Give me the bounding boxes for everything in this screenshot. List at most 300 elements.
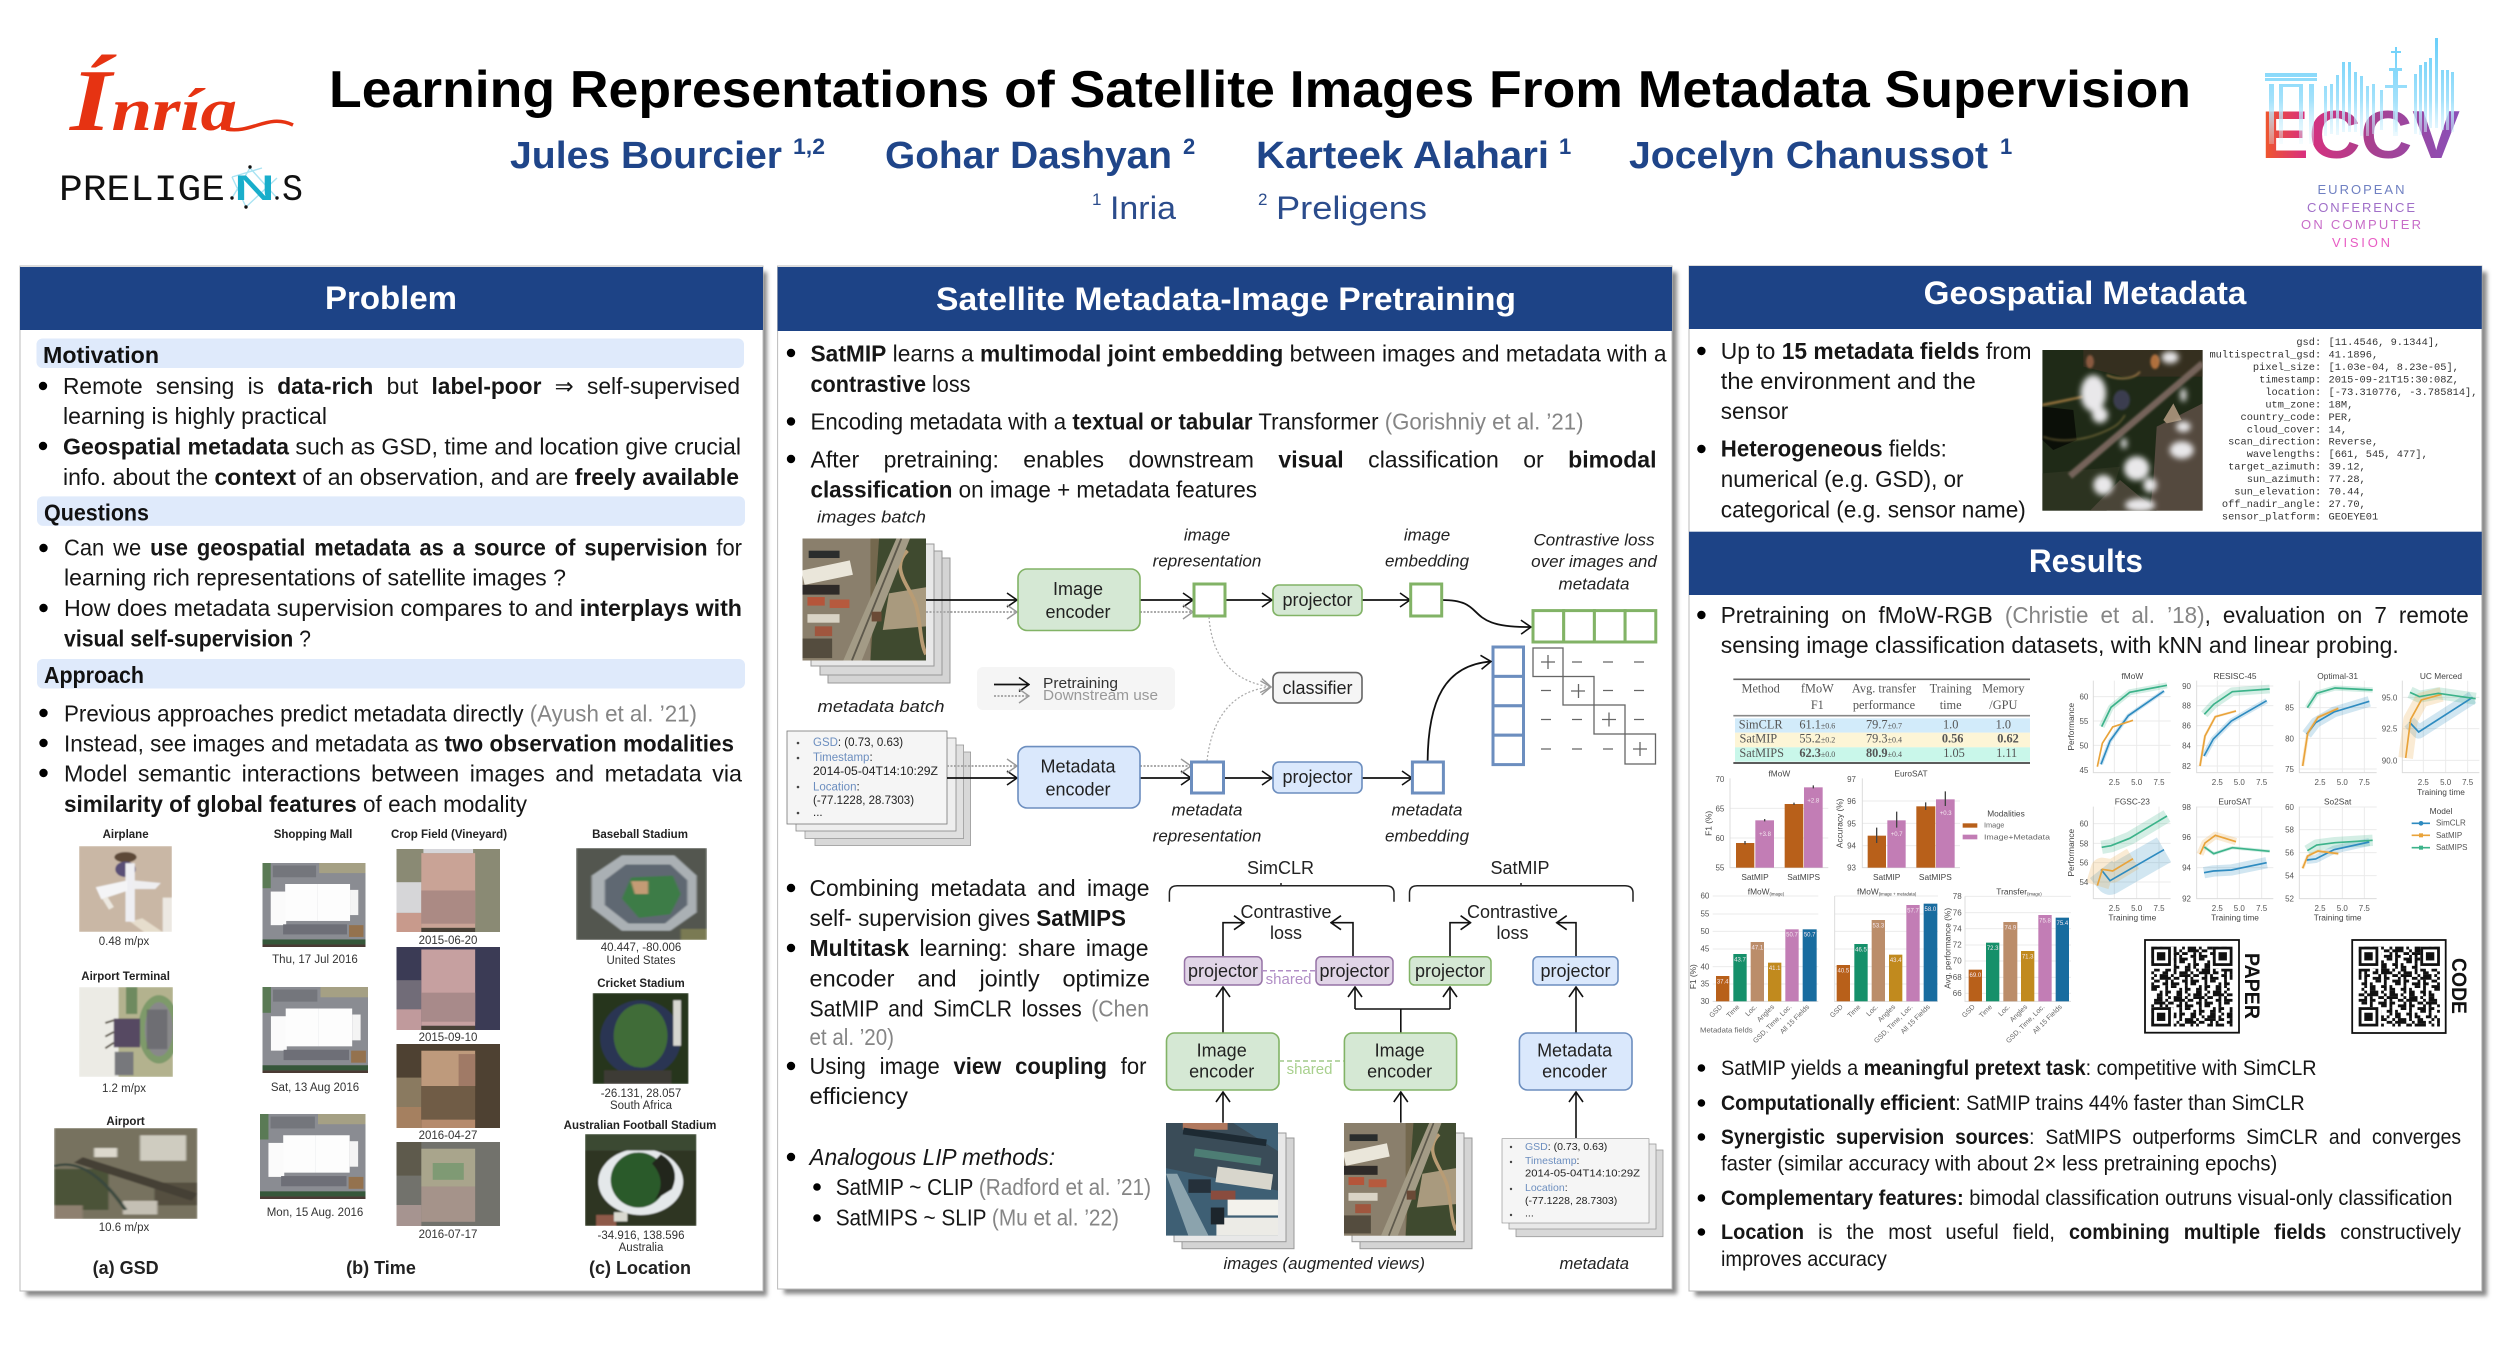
subheading: approach: Approach — [44, 662, 144, 688]
results conclusions bullets: improves accuracy — [1721, 1248, 1887, 1271]
line chart: So2Sat: 52 — [2285, 894, 2295, 903]
results conclusions bullets: Complementary features: bimodal classification outruns visual-only classification — [1721, 1187, 2452, 1210]
line chart: FGSC-23: FGSC-23 — [2115, 796, 2150, 806]
classifier box: classifier — [1282, 678, 1353, 698]
projector purple 1 — [1184, 957, 1262, 985]
line charts: performance vs training time — [2066, 671, 2479, 923]
motivation bullets: info. about the context of an observation, and are freely available — [63, 464, 739, 490]
line chart: UC Merced — [2382, 671, 2479, 797]
line chart: UC Merced: 2.5 — [2418, 778, 2429, 787]
figure: geospatial metadata examples: 2016-07-17 — [419, 1229, 477, 1241]
metadata field list: 70.44, — [2328, 487, 2366, 499]
metadata card stack: GSD: (0.73, 0.63) — [1525, 1141, 1607, 1153]
bar chart: metadata fields fMoW image: Angles — [1756, 1003, 1776, 1024]
diagram: pretraining architecture: image — [1184, 526, 1230, 544]
projector blue — [1533, 957, 1618, 985]
results table: F1 — [1811, 698, 1824, 712]
image encoder box — [1018, 569, 1140, 630]
metadata field list: sun_azimuth: — [2247, 474, 2321, 486]
legend: model: Model — [2430, 806, 2452, 816]
projector green — [1273, 585, 1362, 616]
motivation bullets: Remote sensing is data-rich but label-poor ⇒ self-supervised — [63, 373, 740, 399]
lower bullets: Multitask learning: share image — [810, 935, 1148, 961]
bar chart: metadata fields fMoW image: F1 (%) — [1688, 964, 1698, 989]
bar chart: metadata fields fMoW image: Metadata fields — [1700, 1028, 1753, 1035]
figure: geospatial metadata examples: 2016-04-27 — [419, 1130, 477, 1142]
affiliations — [1092, 190, 1427, 226]
figure: geospatial metadata examples: Airport — [106, 1116, 145, 1128]
bar chart: metadata fields transfer: 66 — [1953, 989, 1962, 998]
figure: geospatial metadata examples: -26.131, 28.057 — [601, 1088, 681, 1100]
diagram: SatMIPS multitask: SimCLR — [1247, 858, 1314, 878]
line chart: RESISC-45: 5.0 — [2234, 778, 2245, 787]
metadata encoder box — [1018, 747, 1140, 808]
line chart: Optimal-31: 5.0 — [2337, 778, 2348, 787]
figure: geospatial metadata examples: United States — [606, 955, 676, 967]
line chart: RESISC-45: 88 — [2182, 702, 2192, 711]
diagram: SatMIPS multitask: Contrastive — [1467, 902, 1558, 922]
diagram: SatMIPS multitask: loss — [1270, 923, 1302, 943]
question bullets — [39, 535, 742, 651]
line chart: EuroSAT: 94 — [2182, 864, 2192, 873]
line chart: fMoW: 60 — [2079, 693, 2089, 702]
logo: ECCV — [2261, 38, 2460, 250]
figure: geospatial metadata examples: 1.2 m/px — [102, 1083, 146, 1095]
legend: model: SatMIPS — [2436, 843, 2468, 852]
metadata field list: utm_zone: — [2265, 399, 2321, 411]
line chart: fMoW: 2.5 — [2109, 778, 2120, 787]
subheading: questions: Questions — [44, 500, 149, 526]
bar chart: EuroSAT accuracy: SatMIPS — [1919, 872, 1952, 882]
QR code: code — [2352, 940, 2470, 1033]
metadata field list: timestamp: — [2259, 374, 2321, 386]
top bullets: contrastive loss — [810, 371, 970, 397]
geospatial bullets: Heterogeneous fields: — [1721, 436, 1947, 462]
question bullets: How does metadata supervision compares to and interplays with — [64, 595, 742, 621]
projector purple 2: projector — [1319, 961, 1390, 981]
results table: 79.7±0.7 — [1866, 717, 1902, 731]
image embedding square — [1411, 584, 1442, 616]
results table: 80.9±0.4 — [1866, 746, 1902, 760]
metadata field list: [661, 545, 477], — [2328, 449, 2428, 461]
authors: Gohar Dashyan — [885, 135, 1172, 177]
line chart: RESISC-45: 84 — [2182, 742, 2192, 751]
projector purple 2 — [1316, 957, 1393, 985]
QR code: paper: PAPER — [2240, 953, 2263, 1019]
results table: 1.0 — [1943, 717, 1958, 731]
metadata field list: PER, — [2328, 412, 2353, 424]
results table: 1.11 — [1996, 746, 2017, 760]
image encoder 1: encoder — [1189, 1062, 1254, 1082]
bar chart: metadata fields fMoW image+metadata: 43.4 — [1890, 958, 1902, 964]
diagram: pretraining architecture: images batch — [817, 508, 926, 526]
authors: 1 — [1559, 134, 1571, 159]
bar chart: fMoW F1: F1 (%) — [1703, 811, 1713, 836]
subheading: motivation: Motivation — [43, 342, 159, 368]
line chart: FGSC-23: 54 — [2079, 878, 2089, 887]
affiliations: Preligens — [1276, 190, 1427, 226]
metadata card stack: ... — [1525, 1208, 1534, 1220]
logo: ECCV: EUROPEAN — [2318, 182, 2404, 197]
bar chart: fMoW F1: 60 — [1715, 834, 1725, 843]
bar chart: metadata fields transfer: Time — [1978, 1004, 1994, 1020]
diagram: pretraining architecture: Contrastive loss — [1534, 530, 1655, 549]
line chart: UC Merced: UC Merced — [2420, 671, 2462, 681]
line chart: So2Sat: 2.5 — [2314, 904, 2326, 913]
geospatial header — [1689, 266, 2482, 329]
results table: Avg. transfer — [1852, 682, 1916, 696]
results table: 62.3±0.0 — [1799, 746, 1835, 760]
figure: geospatial metadata examples: 40.447, -80.006 — [601, 942, 681, 954]
bar chart: metadata fields fMoW image+metadata: 58.0 — [1925, 907, 1937, 913]
line chart: EuroSAT: EuroSAT — [2218, 796, 2252, 806]
figure: geospatial metadata examples: South Africa — [610, 1100, 673, 1112]
metadata batch card stack: GSD: (0.73, 0.63) — [813, 737, 903, 749]
logo: Preligens — [59, 165, 303, 212]
bar chart: metadata fields transfer: All 15 Fields — [2032, 1003, 2064, 1036]
image encoder box: Image — [1053, 579, 1103, 599]
image representation square — [1194, 584, 1225, 616]
results conclusions bullets: Synergistic supervision sources: SatMIPS outperforms SimCLR and converges — [1721, 1126, 2461, 1149]
results table: 61.1±0.6 — [1799, 717, 1835, 731]
classifier box — [1273, 673, 1362, 703]
figure: geospatial metadata examples: Shopping Mall — [274, 829, 352, 841]
figure: geospatial metadata examples: Sat, 13 Aug 2016 — [271, 1082, 359, 1094]
bar chart: fMoW F1: 55 — [1715, 864, 1725, 873]
QR code: paper — [2145, 940, 2263, 1033]
results table: fMoW — [1801, 682, 1834, 696]
image: airport — [54, 1128, 198, 1219]
lower bullets: encoder and jointly optimize — [810, 966, 1150, 992]
line chart: FGSC-23: 2.5 — [2109, 904, 2120, 913]
metadata field list: [11.4546, 9.1344], — [2328, 337, 2440, 349]
bar chart: metadata fields transfer: GSD — [1961, 1004, 1977, 1019]
line chart: Optimal-31: 80 — [2285, 734, 2295, 743]
diagram: SatMIPS multitask — [1166, 858, 1663, 1273]
line chart: FGSC-23 — [2066, 796, 2171, 923]
bar chart: EuroSAT accuracy — [1835, 768, 1960, 882]
metadata encoder box: encoder — [1045, 780, 1111, 800]
geospatial bullets — [1697, 338, 2032, 523]
affiliations: Inria — [1110, 190, 1176, 226]
geospatial bullets: categorical (e.g. sensor name) — [1721, 497, 2026, 523]
bar chart: metadata fields transfer: Angles — [2009, 1003, 2029, 1024]
metadata field list: [-73.310776, -3.785814], — [2328, 387, 2477, 399]
metadata card stack — [1502, 1139, 1663, 1237]
line chart: fMoW: 55 — [2079, 717, 2089, 726]
metadata representation square — [1192, 762, 1224, 793]
results table and bar charts — [1688, 679, 2071, 1045]
line chart: EuroSAT: 96 — [2182, 833, 2192, 842]
lower bullets: SatMIPS ~ SLIP (Mu et al. ’22) — [836, 1205, 1119, 1231]
results intro bullet: sensing image classification datasets, with kNN and linear probing. — [1721, 632, 2399, 658]
results table: /GPU — [1989, 698, 2017, 712]
logo: ECCV: CONFERENCE — [2307, 200, 2415, 215]
line chart: EuroSAT: 2.5 — [2212, 904, 2223, 913]
results intro bullet — [1697, 602, 2469, 658]
authors: Jocelyn Chanussot — [1629, 135, 1988, 177]
bar chart: metadata fields fMoW image+metadata: (image + metadata) — [1879, 891, 1917, 896]
bar chart: EuroSAT accuracy: +0.7 — [1891, 832, 1903, 838]
projector green: projector — [1282, 590, 1353, 610]
results conclusions bullets: Location is the most useful field, combining multiple fields constructively — [1721, 1221, 2461, 1244]
diagram: pretraining architecture: over images and — [1531, 552, 1657, 571]
metadata field list: scan_direction: — [2228, 437, 2321, 449]
legend: model: SimCLR — [2436, 819, 2466, 828]
bar chart: metadata fields transfer — [1943, 886, 2071, 1045]
arrows: image pipeline — [926, 600, 1531, 627]
line chart: FGSC-23: 58 — [2079, 839, 2089, 848]
contrastive matrix — [1493, 611, 1656, 765]
subheading: approach — [37, 659, 745, 688]
bar chart: metadata fields transfer: Loc. — [1997, 1004, 2012, 1018]
legend — [977, 667, 1175, 710]
figure: geospatial metadata examples: (c) Location — [589, 1258, 691, 1278]
bar chart: metadata fields transfer: Transfer — [1996, 886, 2027, 896]
projector blue: projector — [1282, 767, 1353, 787]
line chart: RESISC-45: RESISC-45 — [2213, 671, 2257, 681]
diagram: pretraining architecture — [787, 508, 1657, 846]
results table: 0.62 — [1997, 732, 2019, 746]
bar chart: metadata fields fMoW image: 37.4 — [1717, 979, 1729, 985]
bar chart: EuroSAT accuracy: 96 — [1847, 797, 1857, 806]
line chart: Optimal-31: 85 — [2285, 704, 2295, 713]
line chart: Optimal-31 — [2285, 671, 2377, 787]
line chart: EuroSAT: 98 — [2182, 803, 2192, 812]
line chart: So2Sat: 5.0 — [2337, 904, 2348, 913]
figure: geospatial metadata examples: Australian Football Stadium — [564, 1120, 716, 1132]
legend: modalities: Image+Metadata — [1984, 832, 2051, 841]
line chart: Optimal-31: 7.5 — [2359, 778, 2370, 787]
bar chart: metadata fields fMoW image: GSD, Time, Loc. — [1752, 1004, 1793, 1045]
bar chart: metadata fields fMoW image: 40 — [1700, 962, 1710, 971]
line chart: So2Sat: 58 — [2285, 826, 2295, 835]
geospatial bullets: Up to 15 metadata fields from — [1721, 338, 2032, 364]
line chart: So2Sat — [2285, 796, 2377, 923]
bar chart: metadata fields transfer: (image) — [2027, 891, 2042, 896]
figure: geospatial metadata examples: Cricket Stadium — [597, 978, 685, 990]
bar chart: metadata fields fMoW image: 41.1 — [1769, 966, 1781, 972]
bar chart: EuroSAT accuracy: 93 — [1847, 864, 1857, 873]
metadata field list: multispectral_gsd: — [2209, 350, 2321, 362]
figure: geospatial metadata examples: Australia — [619, 1242, 664, 1254]
authors: 1,2 — [793, 134, 825, 159]
bar chart: metadata fields fMoW image: 50.7 — [1786, 933, 1798, 939]
metadata field list: target_azimuth: — [2228, 462, 2321, 474]
image: airport terminal — [79, 987, 173, 1077]
results table: SatMIP — [1739, 732, 1777, 746]
image: airplane — [79, 846, 172, 932]
metadata field list: pixel_size: — [2253, 362, 2321, 374]
bar chart: metadata fields fMoW image: (image) — [1770, 891, 1785, 896]
line chart: FGSC-23: 5.0 — [2131, 904, 2143, 913]
line chart: RESISC-45: 2.5 — [2212, 778, 2223, 787]
line chart: EuroSAT — [2182, 796, 2273, 923]
line chart: fMoW: 45 — [2079, 766, 2089, 775]
panel: geospatial metadata and results — [1688, 266, 2487, 1296]
image: crop field 2016-07 — [396, 1142, 500, 1226]
authors — [510, 134, 2012, 177]
figure: geospatial metadata examples: -34.916, 138.596 — [598, 1230, 684, 1242]
bar chart: metadata fields transfer: Avg. performance (%) — [1943, 908, 1953, 989]
pretraining header — [778, 267, 1672, 331]
bar chart: metadata fields transfer: GSD, Time, Loc. — [2005, 1004, 2046, 1045]
bar chart: metadata fields fMoW image: 30 — [1700, 997, 1710, 1006]
bar chart: EuroSAT accuracy: Accuracy (%) — [1835, 798, 1845, 848]
images batch stack — [801, 538, 950, 683]
images view 1 stack — [1166, 1123, 1294, 1249]
image: baseball stadium — [576, 848, 707, 940]
logo: ECCV: ON COMPUTER — [2301, 217, 2421, 232]
line chart: UC Merced: 5.0 — [2440, 778, 2452, 787]
metadata field list: [1.03e-04, 8.23e-05], — [2328, 362, 2459, 374]
panel: satellite metadata-image pretraining — [778, 266, 1677, 1294]
bar chart: metadata fields fMoW image: 50 — [1700, 927, 1710, 936]
title: Learning Representations of Satellite Images From Metadata Supervision — [329, 61, 2191, 119]
lower bullets: self- supervision gives SatMIPS — [810, 905, 1126, 931]
legend: modalities: Image — [1984, 821, 2004, 830]
bar chart: metadata fields fMoW image: Time — [1726, 1004, 1741, 1020]
line chart: So2Sat: Training time — [2314, 913, 2362, 923]
legend: model — [2412, 806, 2468, 852]
projector purple 1: projector — [1188, 961, 1258, 981]
bar chart: metadata fields fMoW image: 43.7 — [1734, 957, 1746, 963]
affiliations: 2 — [1258, 190, 1267, 209]
results table: performance — [1853, 698, 1916, 712]
bar chart: metadata fields fMoW image: 50.7 — [1804, 933, 1816, 939]
image: football stadium — [585, 1134, 696, 1226]
legend: model: SatMIP — [2436, 831, 2462, 840]
line chart: EuroSAT: 7.5 — [2256, 904, 2268, 913]
shared encoder label: shared — [1287, 1061, 1332, 1078]
line chart: So2Sat: 60 — [2285, 803, 2295, 812]
bar chart: metadata fields fMoW image+metadata: All 15 Fields — [1900, 1003, 1932, 1036]
downstream arrows to classifier — [1207, 617, 1271, 761]
bar chart: metadata fields fMoW image+metadata: Loc. — [1865, 1004, 1880, 1018]
metadata field list: Reverse, — [2328, 437, 2378, 449]
bar chart: metadata fields transfer: 74.9 — [2005, 925, 2017, 931]
approach bullets: similarity of global features of each modality — [64, 791, 527, 817]
QR code: code: CODE — [2447, 958, 2470, 1014]
diagram: pretraining architecture: representation — [1153, 827, 1261, 846]
results table: SatMIPS — [1739, 746, 1784, 760]
bar chart: metadata fields transfer: 68 — [1953, 973, 1962, 982]
line chart: RESISC-45: 86 — [2182, 722, 2192, 731]
bar chart: EuroSAT accuracy: 95 — [1847, 819, 1857, 828]
image: shopping mall 1 — [262, 863, 366, 947]
line chart: Optimal-31: 2.5 — [2314, 778, 2326, 787]
metadata field list: country_code: — [2240, 412, 2321, 424]
figure: geospatial metadata examples: Mon, 15 Aug. 2016 — [267, 1207, 363, 1219]
bar chart: metadata fields fMoW image+metadata: GSD, Time, Loc. — [1873, 1004, 1914, 1045]
line chart: FGSC-23: 7.5 — [2153, 904, 2165, 913]
geospatial bullets: numerical (e.g. GSD), or — [1721, 466, 1964, 492]
figure: geospatial metadata examples: Thu, 17 Jul 2016 — [272, 954, 358, 966]
figure: geospatial metadata examples: 2015-06-20 — [419, 935, 477, 947]
line chart: UC Merced: 7.5 — [2462, 778, 2474, 787]
top bullets: After pretraining: enables downstream visual classification or bimodal — [810, 446, 1656, 472]
arrows: metadata pipeline — [947, 662, 1491, 778]
diagram: SatMIPS multitask: SatMIP — [1490, 858, 1550, 878]
diagram: pretraining architecture: representation — [1153, 552, 1261, 570]
line chart: fMoW: 7.5 — [2153, 778, 2165, 787]
line chart: RESISC-45 — [2182, 671, 2273, 787]
line chart: UC Merced: 92.5 — [2382, 725, 2398, 734]
motivation bullets: Geospatial metadata such as GSD, time and location give crucial — [63, 434, 741, 460]
bar chart: metadata fields fMoW image+metadata — [1829, 886, 1938, 1045]
image encoder 1 — [1166, 1033, 1279, 1090]
approach bullets: Previous approaches predict metadata directly (Ayush et al. ’21) — [64, 700, 697, 726]
diagram: SatMIPS multitask: images (augmented views) — [1224, 1254, 1425, 1273]
bar chart: fMoW F1: 65 — [1715, 804, 1725, 813]
diagram: pretraining architecture: metadata — [1172, 800, 1242, 820]
lower bullets: efficiency — [810, 1083, 909, 1109]
figure: geospatial metadata examples: 10.6 m/px — [99, 1222, 149, 1234]
results table: Method — [1741, 682, 1781, 696]
geospatial header: Geospatial Metadata — [1924, 275, 2247, 311]
bar chart: EuroSAT accuracy: 94 — [1847, 842, 1857, 851]
geospatial bullets: sensor — [1721, 398, 1789, 424]
metadata field list: wavelengths: — [2247, 449, 2321, 461]
bar chart: metadata fields transfer: 72 — [1953, 941, 1962, 950]
metadata field list: location: — [2265, 387, 2321, 399]
figure: geospatial metadata examples: Baseball Stadium — [592, 829, 688, 841]
bar chart: metadata fields fMoW image: 35 — [1700, 980, 1710, 989]
image encoder 2 — [1344, 1033, 1457, 1090]
metadata field list: sun_elevation: — [2234, 487, 2321, 499]
bar chart: EuroSAT accuracy: 97 — [1847, 775, 1857, 784]
projector green — [1410, 957, 1491, 985]
bar chart: metadata fields transfer: 72.3 — [1987, 946, 1999, 952]
results header: Results — [2029, 543, 2143, 579]
top bullets — [787, 340, 1667, 502]
logo: ECCV: ECCV — [2261, 97, 2460, 173]
bar chart: metadata fields transfer: 74 — [1953, 924, 1962, 933]
line chart: fMoW: Performance — [2066, 702, 2076, 751]
results table: Memory — [1982, 682, 2025, 696]
diagram: pretraining architecture: image — [1404, 526, 1450, 544]
bar chart: metadata fields fMoW image: 47.1 — [1752, 945, 1764, 951]
results table: 0.56 — [1942, 732, 1963, 746]
metadata field list: 18M, — [2328, 399, 2353, 411]
image encoder 2: Image — [1375, 1041, 1425, 1061]
line chart: EuroSAT: 5.0 — [2234, 904, 2245, 913]
image encoder 1: Image — [1197, 1041, 1247, 1061]
metadata field list: GEOEYE01 — [2328, 512, 2378, 524]
bar chart: fMoW F1: 70 — [1715, 775, 1725, 784]
bar chart: metadata fields transfer: 75.8 — [2039, 918, 2051, 924]
lower bullets: SatMIP and SimCLR losses (Chen — [810, 996, 1149, 1022]
metadata field list: cloud_cover: — [2247, 424, 2321, 436]
authors: Karteek Alahari — [1256, 135, 1549, 177]
bar chart: fMoW F1: +3.8 — [1759, 832, 1772, 838]
bar chart: metadata fields transfer: 71.3 — [2022, 954, 2034, 960]
results table: SimCLR — [1739, 717, 1783, 731]
metadata field list: 14, — [2328, 424, 2347, 436]
subheading: questions — [37, 496, 745, 526]
line chart: UC Merced: 90.0 — [2382, 756, 2398, 765]
legend: Downstream use — [1043, 687, 1158, 704]
image: crop field 2016-04 — [396, 1044, 500, 1128]
results table: Training — [1930, 682, 1972, 696]
lower bullets: SatMIP ~ CLIP (Radford et al. ’21) — [836, 1174, 1151, 1200]
line chart: Optimal-31: 75 — [2285, 765, 2295, 774]
metadata field list: 77.28, — [2328, 474, 2366, 486]
metadata card stack: Timestamp: — [1525, 1155, 1579, 1167]
figure: geospatial metadata examples: 2015-09-10 — [419, 1032, 477, 1044]
legend: modalities: Modalities — [1987, 809, 2025, 819]
bar chart: metadata fields fMoW image+metadata: Time — [1847, 1004, 1862, 1020]
